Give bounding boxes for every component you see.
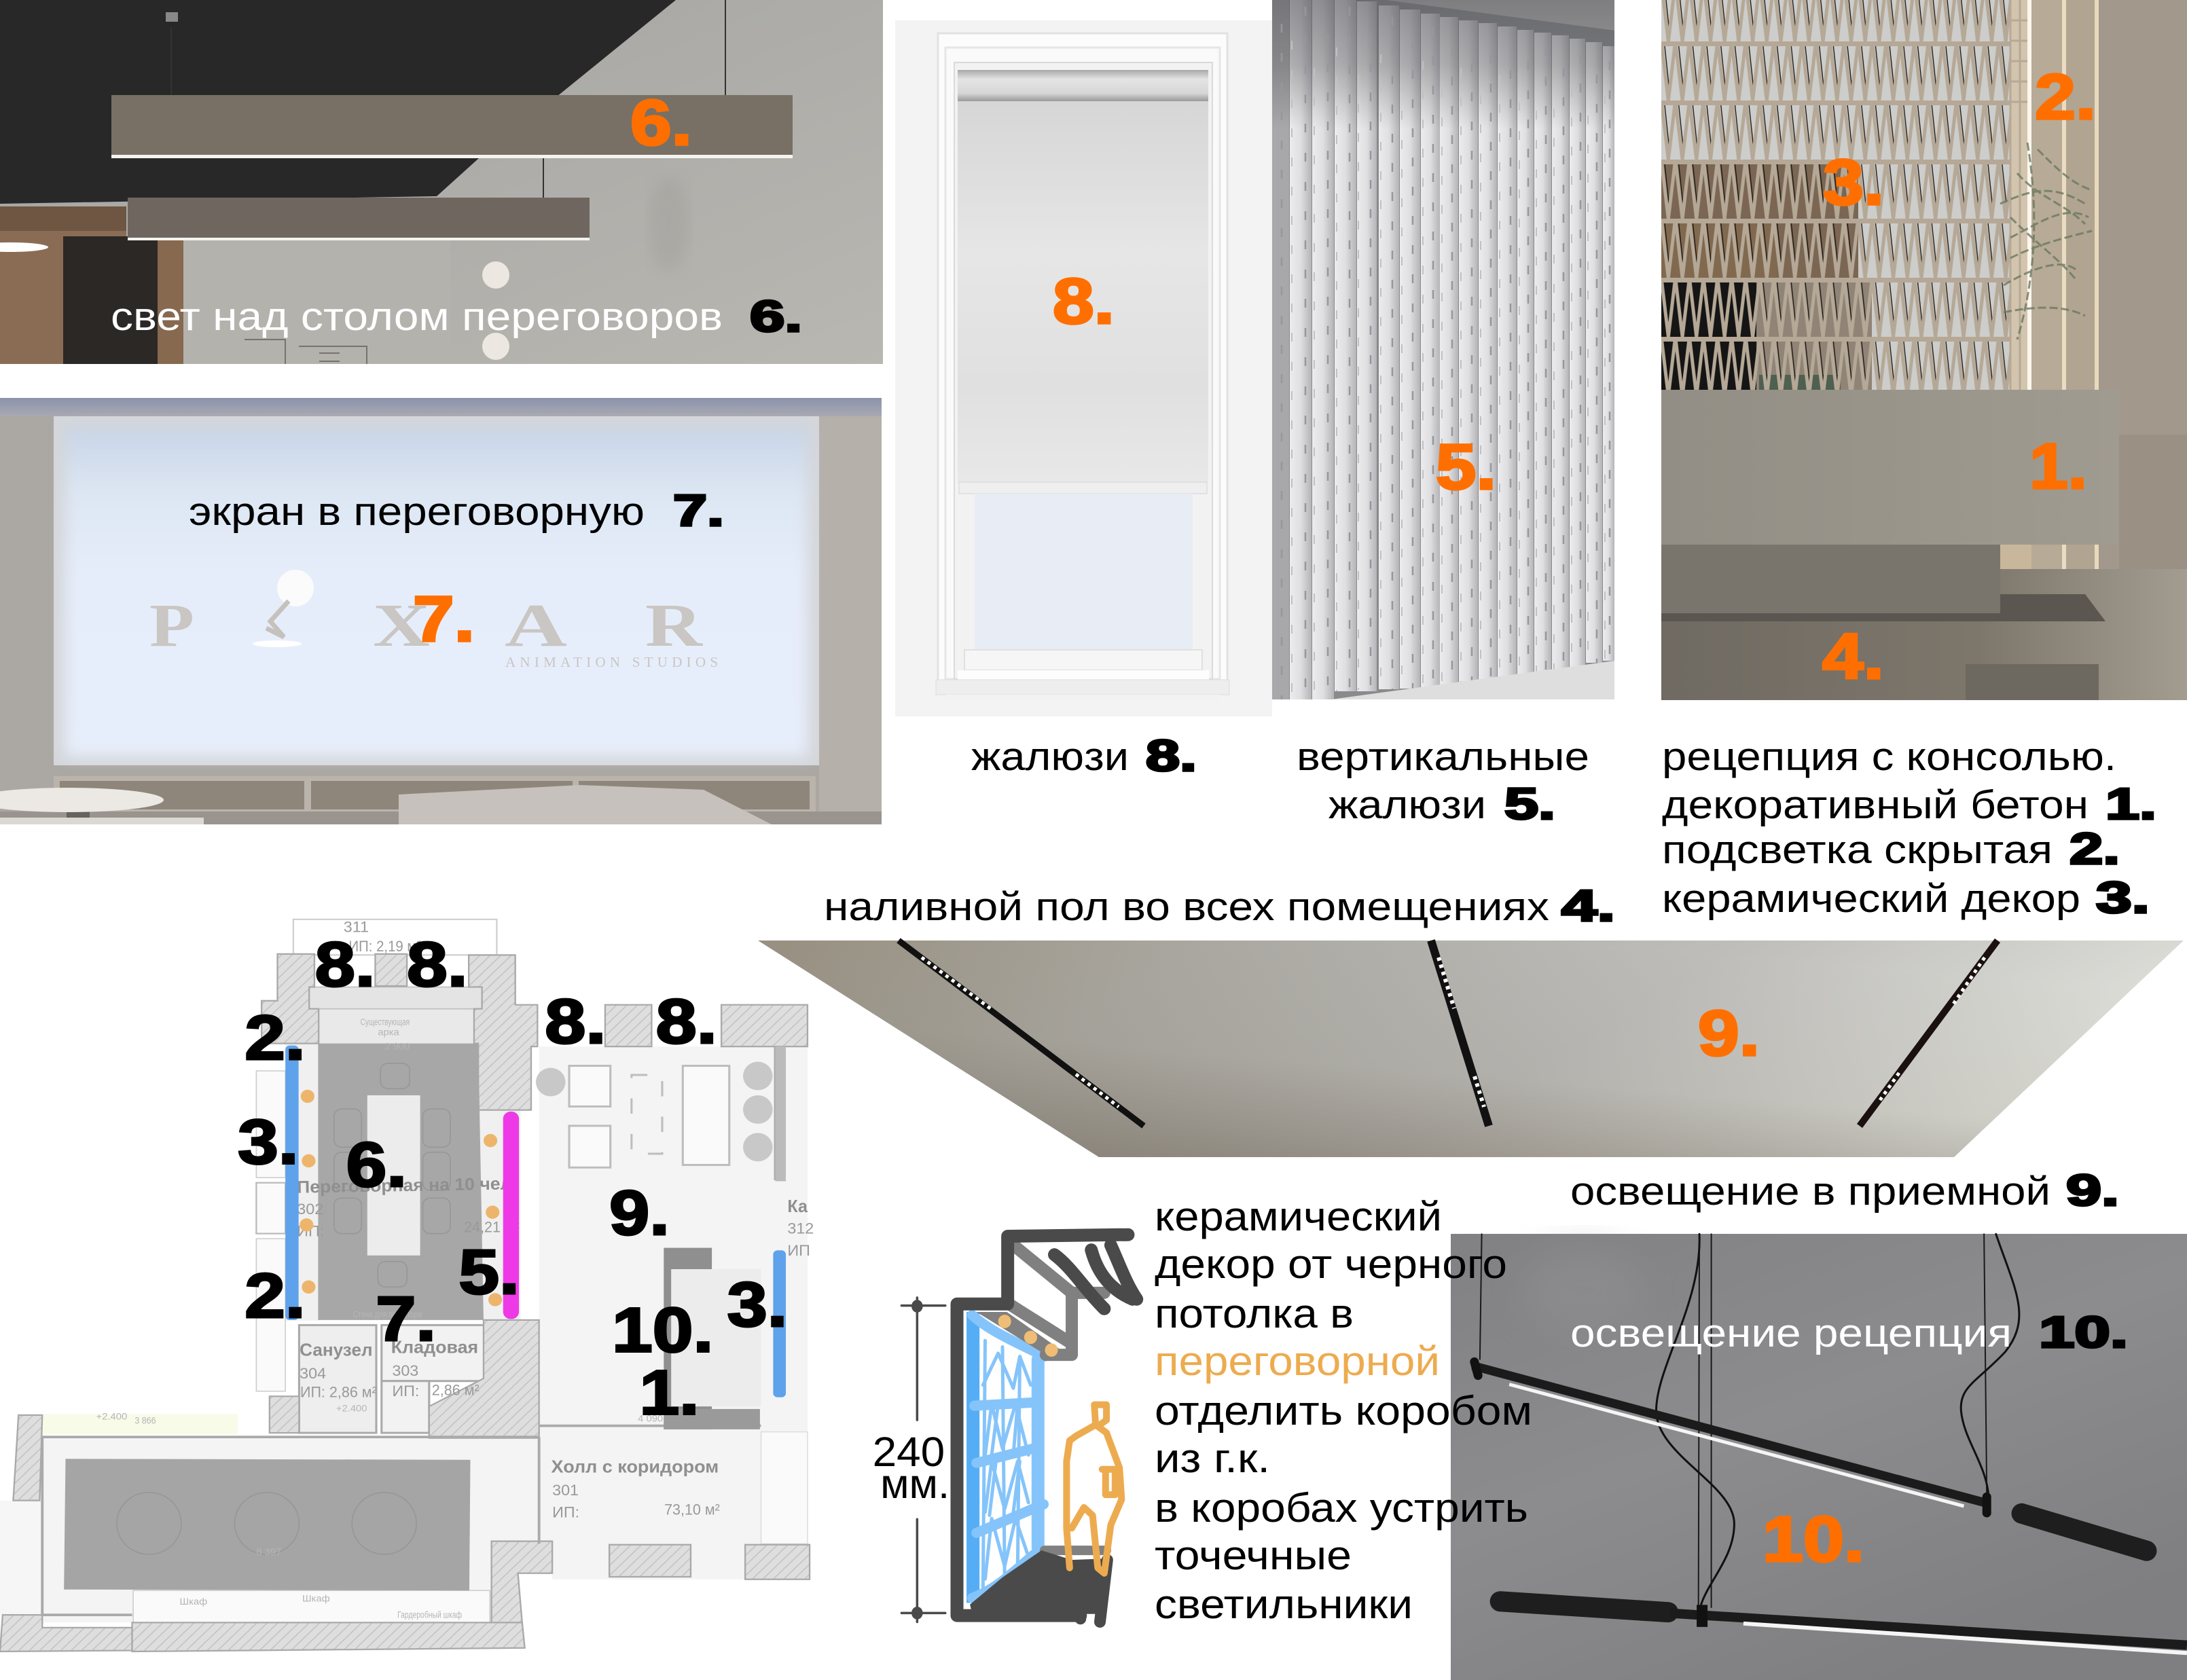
plan numbers: 3. xyxy=(727,1270,787,1340)
plan numbers: 7. xyxy=(376,1283,436,1354)
caption: vertical blinds xyxy=(1297,735,1589,828)
spot lights xyxy=(300,1090,502,1307)
pixar logo on screen: A xyxy=(505,592,567,659)
reception desk base xyxy=(1661,545,2000,613)
room labels: Шкаф xyxy=(180,1596,207,1607)
suspension wires xyxy=(1480,1234,2019,1607)
track light left xyxy=(899,941,1144,1126)
dimension label: 240 xyxy=(873,1429,945,1475)
screen xyxy=(65,428,808,756)
panel: meeting room screen photo xyxy=(0,398,882,824)
room labels: Санузел xyxy=(300,1340,373,1359)
number 6 orange: 6. xyxy=(630,87,692,159)
track light centre xyxy=(1431,941,1489,1126)
room labels: +2.400 xyxy=(96,1412,127,1423)
caption: reception materials: керамический декор xyxy=(1662,877,2080,921)
text block: ceramic decor note: декор от черного xyxy=(1155,1241,1507,1287)
caption: meeting table light: свет над столом переговоров xyxy=(111,295,723,339)
reception desk concrete console xyxy=(1661,390,2119,545)
caption: poured floor: наливной пол во всех помещениях xyxy=(824,885,1549,929)
text block: ceramic decor note xyxy=(1155,1194,1532,1627)
pixar logo on screen xyxy=(149,570,718,670)
room labels: Ка xyxy=(787,1197,808,1216)
room labels: 2 900 xyxy=(384,1042,410,1052)
pendant lamp lower xyxy=(128,198,590,240)
number 5 orange: 5. xyxy=(1436,431,1496,503)
room labels: 4 090 xyxy=(638,1414,663,1425)
person figure xyxy=(1066,1405,1121,1573)
meeting table xyxy=(367,1095,420,1256)
floor plan xyxy=(0,918,814,1651)
plan numbers: 3. xyxy=(238,1107,299,1177)
room floors xyxy=(42,1046,810,1622)
caption: ceiling light xyxy=(1570,1165,2119,1215)
ceramic lattice xyxy=(1661,0,2014,390)
spotlights xyxy=(998,1315,1058,1357)
room labels: ИП: xyxy=(297,1222,324,1239)
plan numbers: 8. xyxy=(656,986,717,1057)
caption: reception materials: 3. xyxy=(2096,873,2150,922)
illuminated columns xyxy=(2031,0,2099,577)
text block: ceramic decor note: из г.к. xyxy=(1155,1436,1270,1481)
window sill xyxy=(936,670,1229,701)
slat perforation dashes xyxy=(1282,7,1610,699)
room labels: ИП xyxy=(787,1241,810,1259)
floor xyxy=(1331,661,1614,699)
text block: ceramic decor note: в коробах устрить xyxy=(1155,1485,1528,1531)
plan numbers: 8. xyxy=(407,930,468,1000)
pixar logo on screen: X xyxy=(373,592,430,659)
pixar logo on screen: R xyxy=(645,592,703,659)
slats xyxy=(1272,0,1614,699)
blind roller xyxy=(958,70,1208,101)
room labels: ИП: 2,19 м² xyxy=(349,937,421,955)
ottoman xyxy=(399,785,772,824)
room labels: 3 866 xyxy=(134,1416,156,1427)
caption: roller blinds xyxy=(971,731,1197,780)
text block: ceramic decor note: керамический xyxy=(1155,1194,1442,1239)
caption: reception materials: подсветка скрытая xyxy=(1662,828,2053,872)
dark ceiling xyxy=(0,0,676,204)
caption: poured floor: 4. xyxy=(1561,881,1615,930)
shelf xyxy=(54,776,816,811)
room labels: 8 397 xyxy=(256,1547,281,1558)
number 4 orange: 4. xyxy=(1822,621,1884,693)
section sketch of ceramic decor xyxy=(873,1235,1137,1622)
caption: ceiling light: освещение в приемной xyxy=(1570,1169,2050,1213)
number 2 orange: 2. xyxy=(2035,61,2096,133)
plan numbers: 5. xyxy=(458,1237,520,1308)
pendant lamp upper xyxy=(1472,1362,2146,1551)
dark floor scribble xyxy=(970,1550,1110,1622)
light blue lattice xyxy=(966,1312,1045,1603)
dark wall and ceiling outline xyxy=(957,1235,1137,1615)
pixar logo on screen: ANIMATION STUDIOS xyxy=(505,654,718,670)
plan numbers: 10. xyxy=(612,1295,713,1366)
room labels: ИП: xyxy=(392,1383,419,1400)
blue ceramic strip left xyxy=(285,1046,299,1320)
caption: reception materials: рецепция с консолью. xyxy=(1662,735,2116,779)
caption: roller blinds: 8. xyxy=(1146,731,1197,780)
caption: vertical blinds: вертикальные xyxy=(1297,735,1589,779)
room labels: 24,21 м² xyxy=(464,1218,520,1235)
text block: ceramic decor note: точечные xyxy=(1155,1533,1352,1578)
meeting room dark zone xyxy=(318,1044,484,1320)
number 10 orange: 10. xyxy=(1763,1503,1864,1575)
plan numbers: 8. xyxy=(315,930,375,1000)
number 10 black: 10. xyxy=(2039,1307,2128,1357)
room labels: Существующая xyxy=(361,1017,410,1028)
text block: ceramic decor note: отделить коробом xyxy=(1155,1388,1532,1434)
plan numbers: 2. xyxy=(245,1261,306,1332)
number 9 orange: 9. xyxy=(1698,998,1760,1070)
caption: reception materials: декоративный бетон xyxy=(1662,783,2089,827)
panel: vertical blinds photo xyxy=(1272,0,1614,699)
lobby dark zone xyxy=(64,1459,471,1590)
caption: reception materials: 1. xyxy=(2105,779,2156,828)
caption: reception materials: 2. xyxy=(2069,824,2120,873)
pendant lamp lower xyxy=(1500,1601,2187,1653)
panel: reception ceiling lighting photo xyxy=(758,941,2184,1157)
room labels: 304 xyxy=(300,1364,326,1382)
room labels: 303 xyxy=(392,1362,418,1379)
number 1 orange: 1. xyxy=(2029,431,2087,503)
text block: ceramic decor note: светильники xyxy=(1155,1582,1413,1627)
room labels: Шкаф xyxy=(302,1594,330,1605)
blind fabric xyxy=(958,101,1208,482)
wood wall xyxy=(2099,0,2187,577)
plan numbers xyxy=(238,930,787,1428)
room labels: 311 xyxy=(344,918,369,936)
window glass xyxy=(975,494,1193,650)
plan numbers: 9. xyxy=(609,1178,670,1249)
icon: lamp xyxy=(253,570,314,647)
side table xyxy=(0,788,204,824)
number 3 orange: 3. xyxy=(1823,147,1884,219)
caption: reception pendant: освещение рецепция xyxy=(1570,1311,2012,1355)
room labels: Гардеробный шкаф xyxy=(397,1610,462,1621)
room labels: +2.400 xyxy=(336,1404,367,1414)
room labels: 73,10 м² xyxy=(664,1501,720,1518)
plan numbers: 6. xyxy=(346,1130,407,1201)
dimension label: мм. xyxy=(880,1461,950,1507)
plan numbers: 2. xyxy=(245,1002,306,1073)
pendant lamp upper xyxy=(111,95,793,158)
caption: roller blinds: жалюзи xyxy=(971,735,1129,779)
track light right xyxy=(1860,941,1998,1126)
height dimension line xyxy=(901,1298,945,1622)
number 7 orange: 7. xyxy=(413,583,475,655)
panel: meeting table lighting photo xyxy=(0,0,883,364)
room labels: ИП: 2,86 м² xyxy=(300,1383,377,1401)
panel: reception pendant lights photo xyxy=(1451,1234,2187,1680)
reception desk xyxy=(664,1248,761,1429)
room labels: ИП: xyxy=(552,1503,579,1520)
caption: reception materials xyxy=(1662,735,2156,922)
number 7 black: 7. xyxy=(673,486,724,535)
plan numbers: 1. xyxy=(640,1357,699,1428)
panel: roller blind photo xyxy=(895,20,1272,716)
text block: ceramic decor note: переговорной xyxy=(1155,1338,1440,1384)
number 6 black: 6. xyxy=(750,291,802,341)
room labels: Кладовая xyxy=(391,1337,478,1357)
room labels xyxy=(96,918,814,1621)
plant xyxy=(2000,143,2092,340)
panel: reception photo xyxy=(1661,0,2187,700)
text block: ceramic decor note: потолка в xyxy=(1155,1291,1354,1336)
caption: vertical blinds: 5. xyxy=(1504,779,1555,828)
hatched walls xyxy=(0,954,810,1651)
room labels: 302 xyxy=(297,1201,323,1218)
room labels: Стена для проектора xyxy=(353,1309,422,1320)
caption: screen: экран в переговорную xyxy=(189,490,645,534)
caption: vertical blinds: жалюзи xyxy=(1329,783,1486,827)
gray soffit box xyxy=(977,1247,1106,1550)
blue ceramic strip right xyxy=(773,1250,786,1398)
plan numbers: 8. xyxy=(545,986,606,1057)
dimension label xyxy=(873,1429,950,1507)
floor xyxy=(1661,569,2187,700)
room labels: 2,86 м² xyxy=(432,1381,480,1399)
caption: ceiling light: 9. xyxy=(2066,1165,2119,1215)
room labels: 312 xyxy=(787,1220,814,1237)
room labels: арка xyxy=(378,1027,400,1038)
room labels: Холл с коридором xyxy=(552,1457,719,1476)
room labels: 301 xyxy=(552,1482,579,1499)
number 8 orange: 8. xyxy=(1053,266,1115,337)
pixar logo on screen: P xyxy=(149,592,194,659)
lounge furniture xyxy=(536,1062,773,1167)
magenta vertical blinds strip xyxy=(503,1112,519,1319)
room labels: Переговорная на 10 чел. xyxy=(297,1173,517,1197)
